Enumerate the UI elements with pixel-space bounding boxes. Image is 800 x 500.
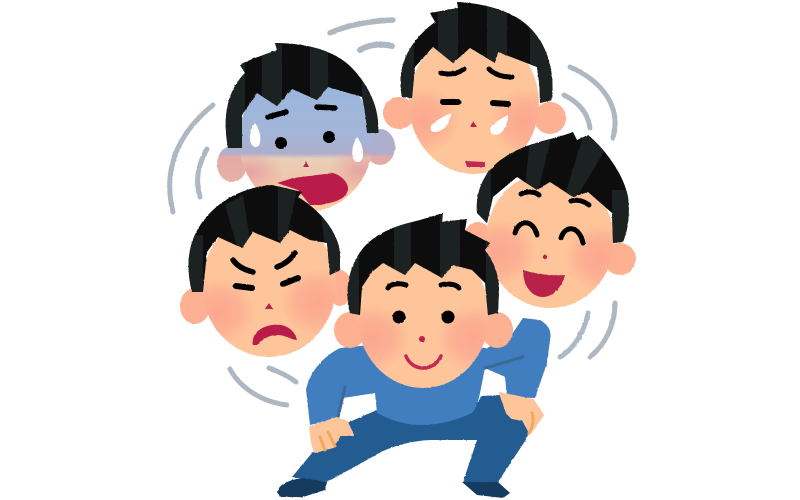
angry eyebrows: [233, 253, 295, 272]
sad hair: [400, 2, 553, 103]
happy mouth: [523, 270, 565, 297]
sad mouth: [465, 161, 485, 167]
main face: [357, 242, 489, 388]
trousers: [292, 395, 528, 482]
happy eyes: [515, 223, 583, 243]
tears: [431, 113, 508, 135]
main figure crouching: [277, 210, 551, 498]
happy eyebrows: [521, 192, 589, 205]
main ears: [334, 312, 513, 348]
angry hair: [189, 185, 340, 292]
head: angry: [180, 180, 356, 357]
sweater fold lines: [338, 357, 523, 417]
right shoe: [462, 482, 510, 498]
scared nose: [303, 161, 309, 167]
main eyes: [392, 310, 454, 324]
sad eyebrows: [441, 69, 512, 77]
motion lines around the heads: [170, 20, 615, 405]
scared eyebrows: [268, 107, 335, 117]
head: sad, crying: [383, 0, 566, 174]
sad closed eyes: [443, 102, 508, 104]
head: scared, blue face: [216, 40, 396, 212]
angry nose: [265, 303, 273, 309]
right hand: [500, 393, 543, 433]
sweater: [306, 318, 551, 425]
happy nose: [543, 255, 547, 259]
left shoe: [277, 478, 327, 497]
sad nose: [470, 121, 477, 127]
main nose: [419, 336, 425, 342]
scared eyes: [275, 131, 335, 149]
main smile: [406, 356, 441, 368]
sweat drops: [250, 123, 363, 162]
main eyebrows: [388, 284, 459, 288]
happy hair: [477, 132, 629, 243]
scared mouth: [277, 173, 348, 205]
angry mouth: [253, 325, 297, 345]
head: happy, laughing: [464, 130, 636, 308]
scared hair: [226, 43, 378, 148]
illustration: man with many changing facial expressions: [166, 2, 636, 498]
main hair: [348, 213, 499, 315]
left hand: [310, 418, 353, 452]
angry eyes: [236, 278, 298, 288]
